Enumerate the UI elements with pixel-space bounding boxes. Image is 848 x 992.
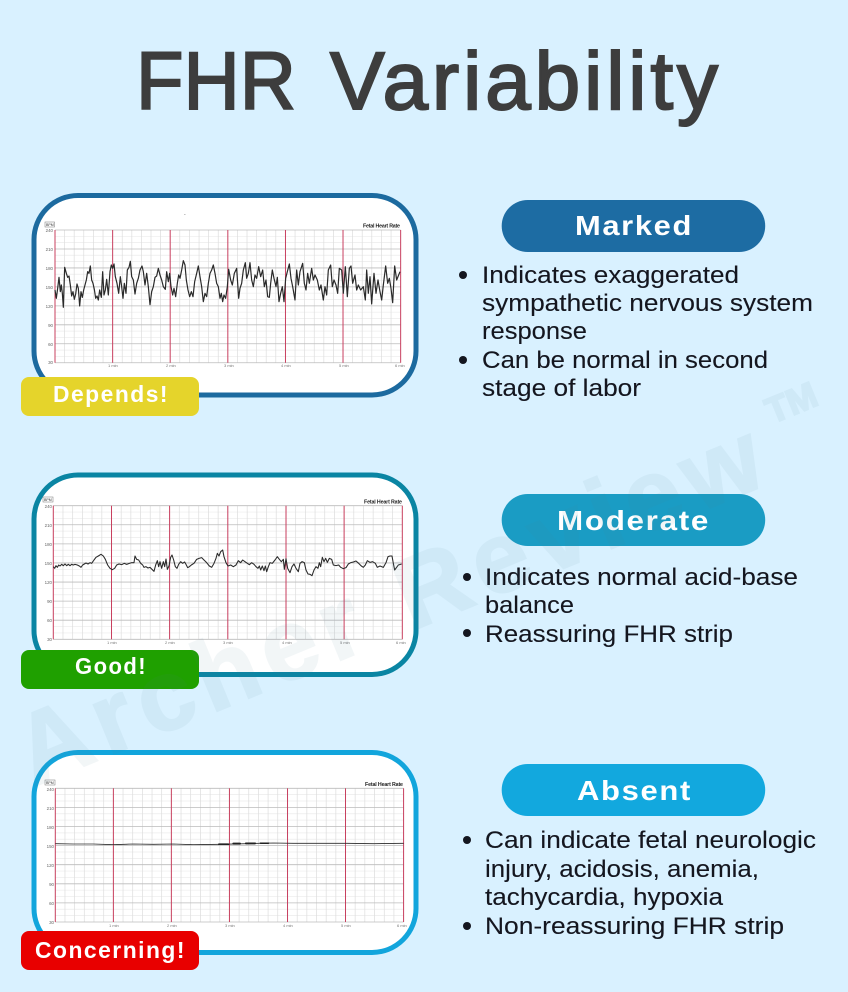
strip card: marked: 150 — [46, 285, 54, 290]
bullet list: moderate: balance — [485, 592, 574, 619]
strip card: moderate: Fetal Heart Rate — [364, 500, 402, 506]
bullet list: absent: Non-reassuring FHR strip — [485, 913, 784, 940]
bullet list: marked: Indicates exaggerated — [482, 262, 739, 289]
pill heading: marked — [502, 200, 765, 252]
strip card: moderate: 1 min — [107, 640, 117, 645]
strip card: marked: 210 — [46, 247, 54, 252]
badge: good — [21, 650, 199, 689]
strip card: moderate — [34, 475, 416, 674]
strip card: moderate: 4 min — [282, 640, 292, 645]
badge: concerning — [21, 931, 199, 970]
badge: concerning: Concerning! — [35, 937, 186, 963]
strip card: moderate: 150 — [45, 561, 53, 566]
strip card: absent: 4 min — [283, 923, 293, 928]
watermark: Archer Review — [0, 400, 778, 807]
strip card: absent: 120 — [47, 863, 55, 868]
strip card: marked: 90 — [48, 323, 54, 328]
strip card: absent: 240 — [47, 787, 55, 792]
pill heading: marked: Marked — [575, 210, 693, 241]
strip card: absent: BPM — [46, 781, 54, 785]
strip card: moderate: 30 — [47, 637, 53, 642]
strip card: marked: BPM — [46, 223, 54, 227]
strip card: absent: 90 — [49, 882, 55, 887]
strip card: moderate: 60 — [47, 618, 53, 623]
strip card: absent: 210 — [47, 806, 55, 811]
strip card: absent: 5 min — [341, 923, 351, 928]
strip card: marked — [34, 196, 416, 395]
bullet list: marked: Can be normal in second — [482, 347, 768, 374]
marked variability trace — [55, 261, 400, 307]
bullet list: marked: stage of labor — [482, 375, 641, 402]
strip card: absent: 3 min — [225, 923, 235, 928]
strip card: moderate: 240 — [45, 504, 53, 509]
badge: depends: Depends! — [53, 381, 169, 407]
panel: moderate — [21, 475, 798, 689]
watermark: TM — [759, 374, 823, 431]
bullet list: moderate: Indicates normal acid-base — [485, 564, 798, 591]
moderate variability trace — [53, 550, 402, 576]
strip card: moderate: 6 min — [396, 640, 406, 645]
strip card: marked: Fetal Heart Rate — [363, 224, 400, 230]
badge: depends — [21, 377, 199, 416]
strip card: absent: 150 — [47, 844, 55, 849]
strip card: moderate: BPM — [44, 498, 52, 502]
strip card: moderate: 5 min — [340, 640, 350, 645]
title — [136, 36, 718, 127]
bullet list: moderate: Reassuring FHR strip — [485, 621, 733, 648]
strip card: absent: 1 min — [109, 923, 119, 928]
strip card: absent: 60 — [49, 901, 55, 906]
strip card: marked: 3 min — [224, 363, 234, 368]
strip card: absent: 6 min — [397, 923, 407, 928]
bullet list: absent: injury, acidosis, anemia, — [485, 856, 759, 883]
strip card: moderate: 2 min — [165, 640, 175, 645]
strip card: moderate: 120 — [45, 580, 53, 585]
title: FHR — [136, 36, 296, 127]
absent variability trace — [56, 843, 403, 845]
pill heading: moderate — [502, 494, 765, 546]
strip card: absent: Fetal Heart Rate — [365, 782, 403, 788]
strip card: marked: 6 min — [395, 363, 405, 368]
strip card: absent: 180 — [47, 825, 55, 830]
strip card: marked: 2 min — [166, 363, 176, 368]
pill heading: moderate: Moderate — [557, 505, 710, 536]
strip card: absent — [34, 752, 416, 952]
strip card: marked: 240 — [46, 228, 54, 233]
strip card: absent: 30 — [49, 920, 55, 925]
bullet list: absent: Can indicate fetal neurologic — [485, 827, 816, 854]
panel: marked — [21, 196, 813, 416]
title: Variability — [330, 36, 718, 127]
bullet list: absent: tachycardia, hypoxia — [485, 884, 724, 911]
strip card: moderate: 210 — [45, 523, 53, 528]
bullet list: marked: sympathetic nervous system — [482, 290, 813, 317]
strip card: marked: 4 min — [281, 363, 291, 368]
strip card: moderate: 180 — [45, 542, 53, 547]
strip card: absent: 2 min — [167, 923, 177, 928]
strip card: moderate: 3 min — [223, 640, 233, 645]
bullet list: marked: response — [482, 318, 587, 345]
bullet list: marked — [459, 262, 813, 402]
badge: good: Good! — [75, 653, 147, 679]
pill heading: absent: Absent — [577, 775, 692, 806]
strip card: marked: 5 min — [339, 363, 349, 368]
strip card: marked: 30 — [48, 360, 54, 365]
strip card: marked: 60 — [48, 342, 54, 347]
strip card: moderate: 90 — [47, 599, 53, 604]
pill heading: absent — [502, 764, 765, 816]
bullet list: moderate — [463, 564, 798, 648]
strip card: marked: 1 min — [108, 363, 118, 368]
strip card: marked: 180 — [46, 266, 54, 271]
strip card: marked: - — [184, 212, 186, 218]
panel: absent — [21, 752, 816, 970]
strip card: marked: 120 — [46, 304, 54, 309]
bullet list: absent — [463, 827, 816, 940]
